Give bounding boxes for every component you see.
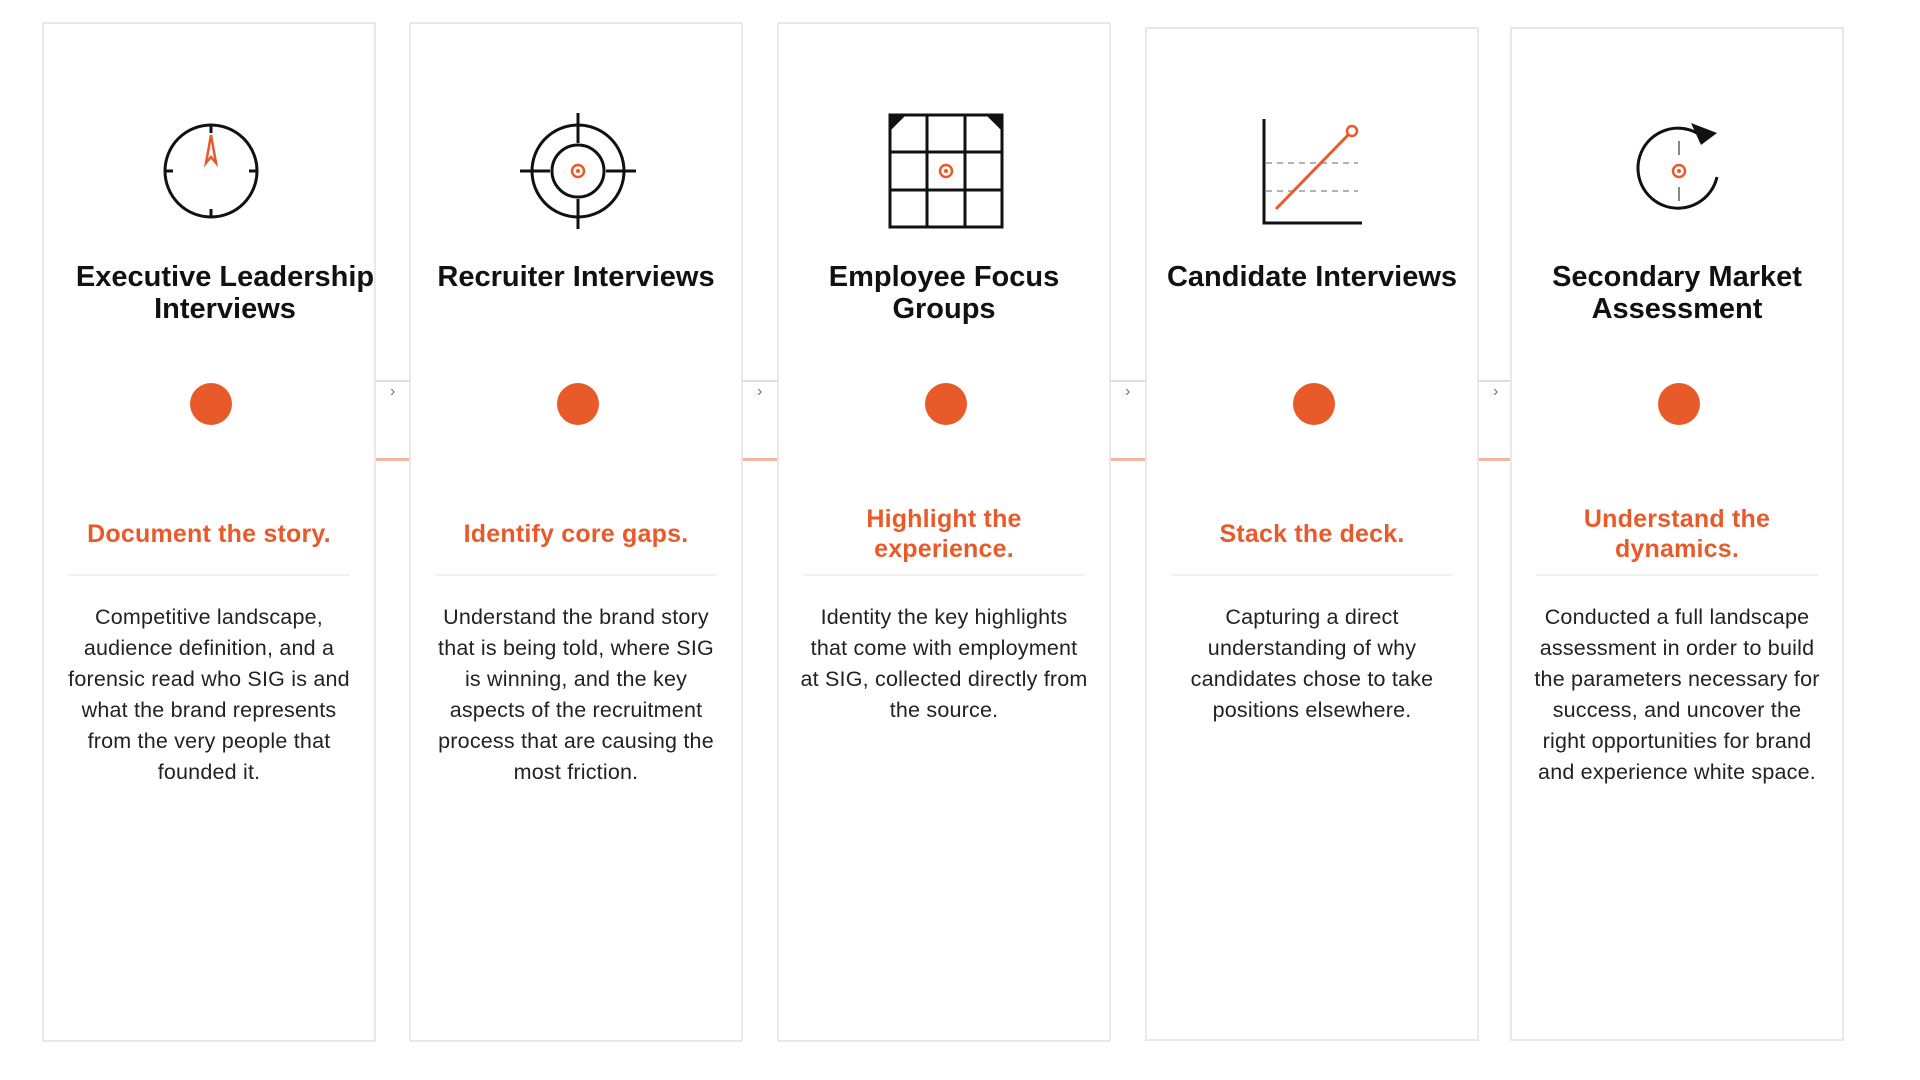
body text: Understand the brand story bbox=[443, 605, 709, 629]
subheading: Understand the bbox=[1584, 505, 1770, 533]
body text: at SIG, collected directly from bbox=[800, 667, 1088, 691]
arrow: connector 1 bbox=[376, 380, 409, 461]
arrow: connector 4: › bbox=[1493, 383, 1498, 400]
timeline dot bbox=[1658, 383, 1700, 425]
icon: line chart bbox=[1262, 119, 1362, 224]
heading: Interviews bbox=[154, 293, 296, 325]
body text: assessment in order to build bbox=[1540, 636, 1814, 660]
body text: the source. bbox=[890, 698, 998, 722]
body text: aspects of the recruitment bbox=[450, 698, 702, 722]
heading: Executive Leadership bbox=[76, 261, 374, 293]
heading bbox=[1552, 261, 1802, 325]
heading: Assessment bbox=[1592, 293, 1762, 325]
panel: recruiter interviews bbox=[409, 22, 743, 1042]
body text bbox=[1191, 605, 1433, 722]
heading: Candidate Interviews bbox=[1167, 261, 1457, 293]
body text: what the brand represents bbox=[82, 698, 336, 722]
body text: Competitive landscape, bbox=[95, 605, 323, 629]
subheading: Document the story. bbox=[87, 520, 331, 548]
body text: success, and uncover the bbox=[1553, 698, 1801, 722]
body text: the parameters necessary for bbox=[1534, 667, 1820, 691]
arrow: connector 3: › bbox=[1125, 383, 1130, 400]
panel: executive leadership interviews bbox=[42, 22, 376, 1042]
timeline dot bbox=[925, 383, 967, 425]
body text: founded it. bbox=[158, 760, 260, 784]
body text: is winning, and the key bbox=[465, 667, 687, 691]
heading bbox=[76, 261, 374, 325]
body text: from the very people that bbox=[88, 729, 330, 753]
body text: and experience white space. bbox=[1538, 760, 1816, 784]
panel: employee focus groups bbox=[777, 22, 1111, 1042]
icon: rotating target bbox=[1636, 123, 1718, 210]
icon: crosshair bbox=[520, 113, 636, 229]
body text: that is being told, where SIG bbox=[438, 636, 714, 660]
body text bbox=[1534, 605, 1820, 784]
panel: candidate interviews bbox=[1145, 27, 1479, 1041]
arrow: connector 2 bbox=[743, 380, 777, 461]
body text: Conducted a full landscape bbox=[1545, 605, 1809, 629]
body text: audience definition, and a bbox=[84, 636, 334, 660]
arrow: connector 3 bbox=[1111, 380, 1145, 461]
heading: Groups bbox=[892, 293, 996, 325]
body text: most friction. bbox=[514, 760, 638, 784]
heading: Recruiter Interviews bbox=[437, 261, 715, 293]
body text: Identity the key highlights bbox=[821, 605, 1067, 629]
body text bbox=[800, 605, 1088, 722]
body text: Capturing a direct bbox=[1225, 605, 1399, 629]
body text bbox=[438, 605, 714, 784]
body text: process that are causing the bbox=[438, 729, 714, 753]
timeline dot bbox=[190, 383, 232, 425]
timeline dot bbox=[1293, 383, 1335, 425]
body text bbox=[68, 605, 350, 784]
body text: forensic read who SIG is and bbox=[68, 667, 350, 691]
icon: compass bbox=[164, 124, 258, 218]
heading: Employee Focus bbox=[829, 261, 1059, 293]
subheading: Identify core gaps. bbox=[464, 520, 688, 548]
arrow: connector 1: › bbox=[390, 383, 395, 400]
body text: positions elsewhere. bbox=[1213, 698, 1411, 722]
subheading: dynamics. bbox=[1615, 535, 1739, 563]
body text: candidates chose to take bbox=[1191, 667, 1433, 691]
subheading: experience. bbox=[874, 535, 1014, 563]
icon: grid bbox=[888, 114, 1004, 228]
subheading: Stack the deck. bbox=[1219, 520, 1405, 548]
panel: secondary market assessment bbox=[1510, 27, 1844, 1041]
timeline dot bbox=[557, 383, 599, 425]
arrow: connector 4 bbox=[1479, 380, 1510, 461]
body text: that come with employment bbox=[811, 636, 1077, 660]
subheading bbox=[866, 505, 1022, 563]
body text: understanding of why bbox=[1208, 636, 1416, 660]
arrow: connector 2: › bbox=[757, 383, 762, 400]
body text: right opportunities for brand bbox=[1543, 729, 1811, 753]
heading bbox=[829, 261, 1059, 325]
subheading: Highlight the bbox=[866, 505, 1022, 533]
heading: Secondary Market bbox=[1552, 261, 1802, 293]
subheading bbox=[1584, 505, 1770, 563]
